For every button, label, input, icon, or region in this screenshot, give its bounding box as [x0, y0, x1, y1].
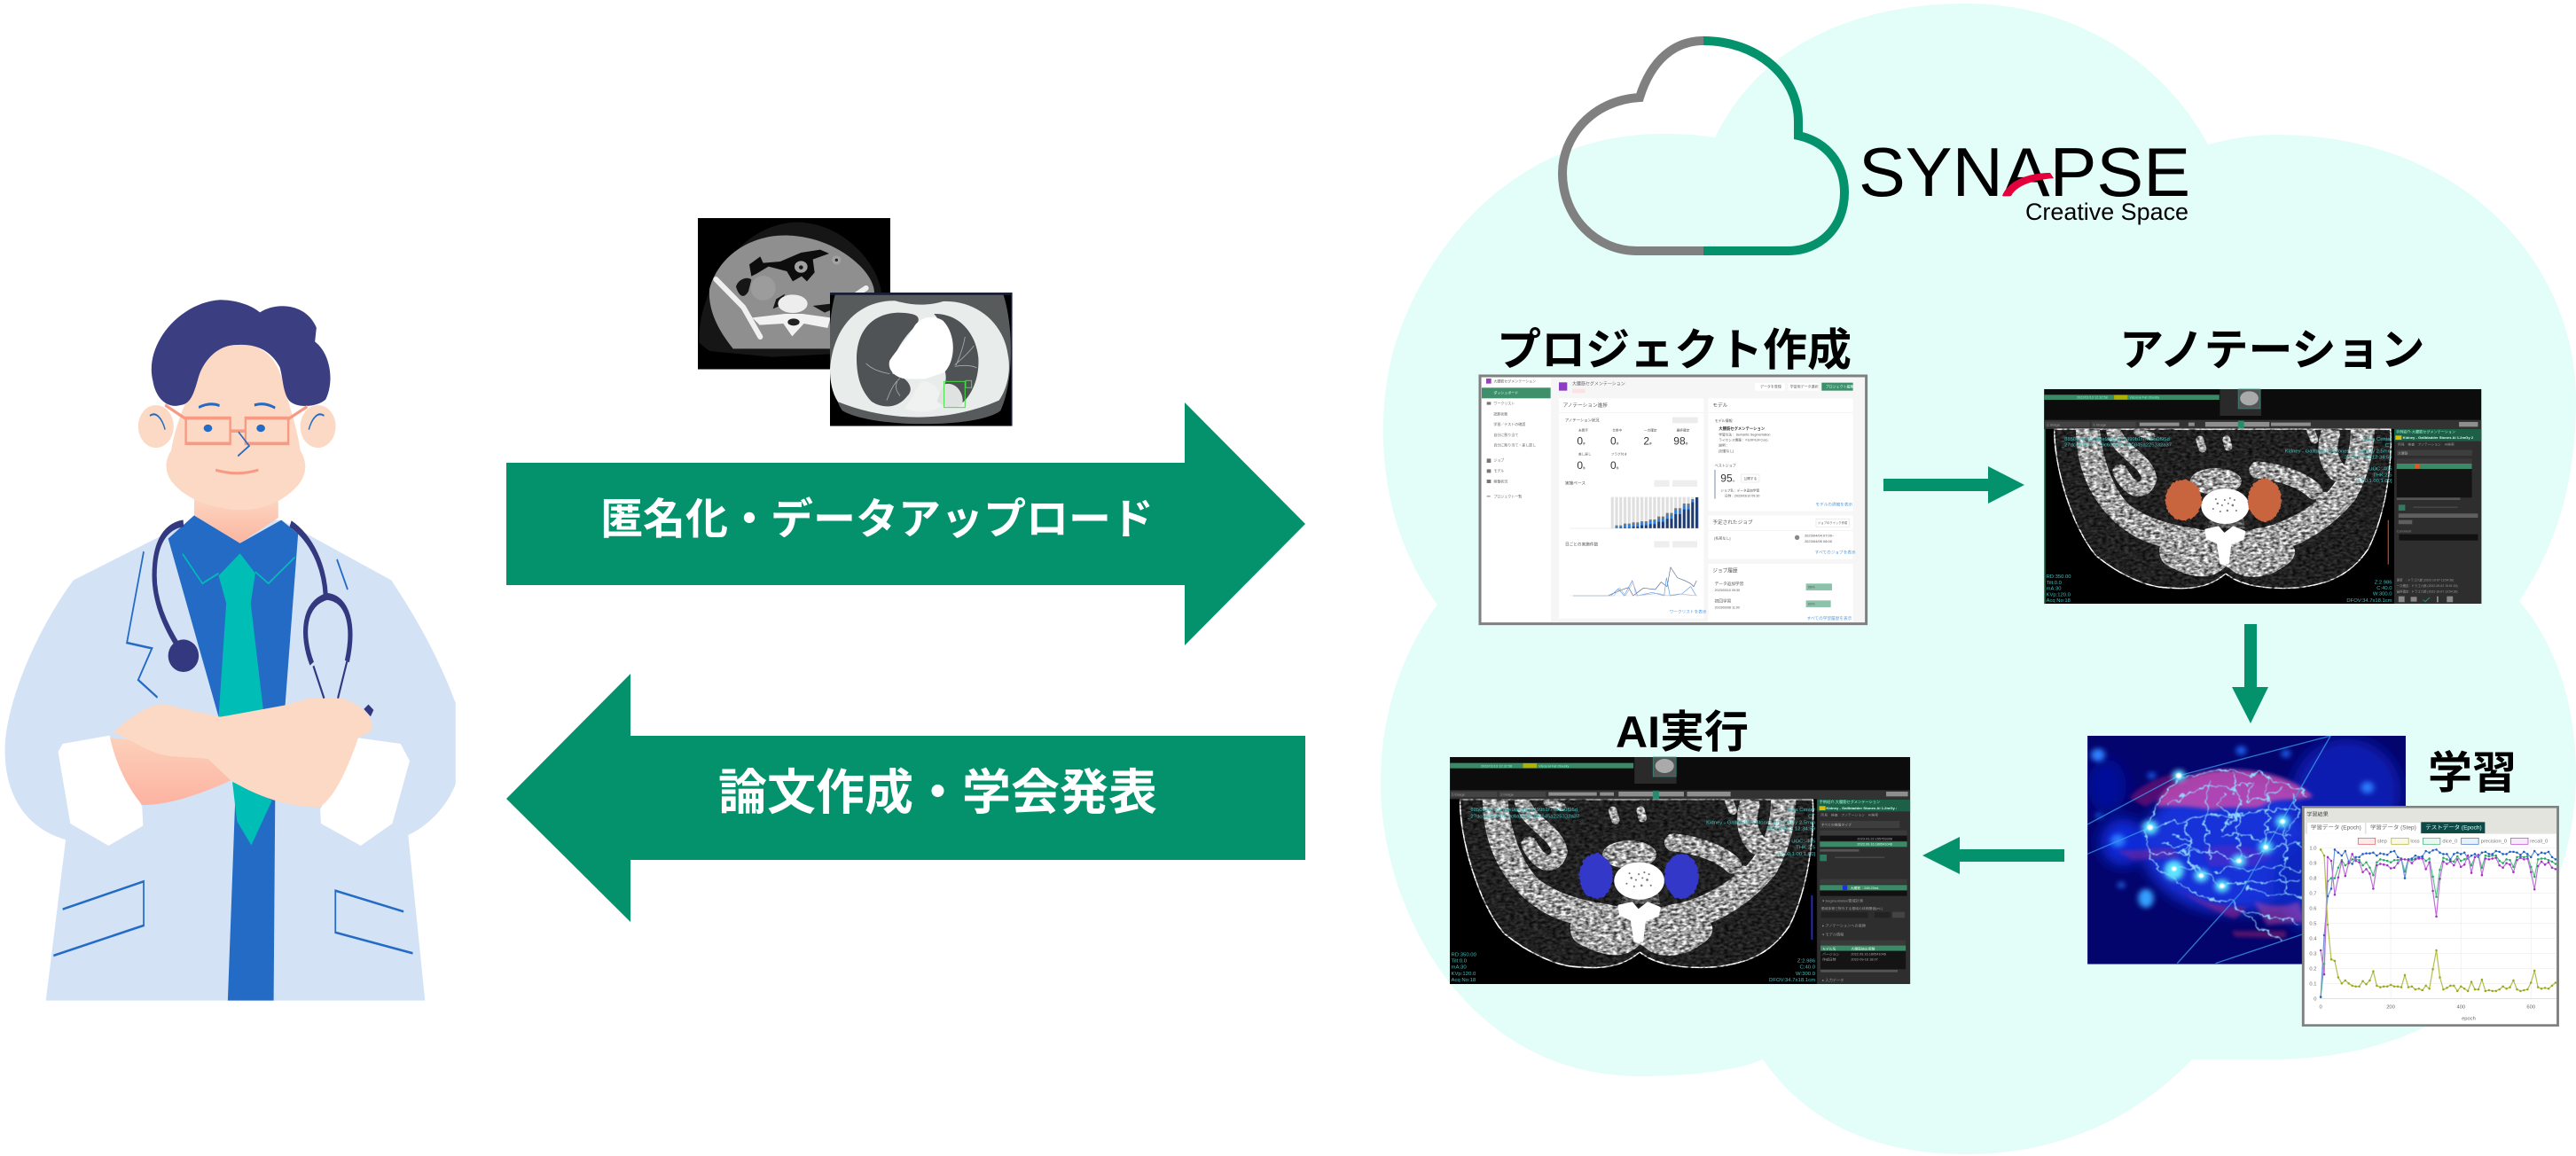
right AI panel — [1817, 799, 1910, 984]
heading: training: 学習 — [2428, 748, 2517, 798]
sidebar: 学習／テストの確認 — [1493, 421, 1525, 426]
overlay text: Tilt:0.0 — [1451, 959, 1467, 965]
right AI panel: 2023.03.22.155753306 — [1857, 837, 1892, 840]
arrow: annotation to training — [2232, 624, 2268, 723]
logo: SYNAPSE wordmark: Creative Space — [2025, 199, 2188, 225]
overlay text: mA:30 — [2047, 587, 2061, 592]
right AI panel: ▸ 入力データ — [1822, 977, 1844, 982]
axis labels: 0.1 — [2309, 981, 2316, 987]
chart: implementation pace stacked bars — [1570, 497, 1698, 528]
card: scheduled jobs: すべてのジョブを表示 — [1815, 549, 1856, 555]
chart panel: training metrics: テストデータ (Epoch) — [2425, 824, 2482, 831]
card: job history: すべての学習履歴を表示 — [1807, 615, 1852, 621]
chart panel: training metrics: 200 — [2386, 1004, 2395, 1010]
right AI panel: ▾ Segmentation領域計測 — [1822, 898, 1863, 903]
page header: 学習用データ選択 — [1790, 384, 1819, 389]
arrow: upload to cloud — [506, 402, 1305, 645]
overlay text: DFOV:34.7x18.1cm — [2346, 598, 2392, 604]
legend: recall_0 — [2530, 839, 2548, 844]
toolbar: 1 Image — [1452, 793, 1466, 797]
chart panel: training metrics: 学習結果 — [2306, 811, 2329, 817]
card: scheduled jobs: [名前なし] — [1714, 535, 1730, 541]
card: job history — [1708, 564, 1853, 622]
overlay text: RD:350.00 — [1451, 953, 1476, 958]
right AI panel: 2022.09.16.180541046 — [1851, 953, 1886, 957]
legend: step — [2377, 839, 2387, 844]
overlay text: mA:30 — [1451, 965, 1467, 971]
right tool panel: 更新 : ドラゴ六郎 (2022-10-07 13:54:36) — [2397, 578, 2454, 582]
card: annotation progress: 2件 — [1643, 435, 1652, 448]
toolbar: 1 Image — [1500, 793, 1515, 797]
series list: 2022/01/13 12:32:58 — [1481, 764, 1512, 768]
chart panel: training metrics: epoch — [2462, 1016, 2476, 1021]
card: model: 95% — [1720, 473, 1735, 485]
card: model: 大腰筋セグメンテーション — [1719, 426, 1766, 432]
right tool panel — [2394, 428, 2481, 604]
card: annotation progress — [1559, 398, 1703, 619]
heading: project creation: プロジェクト作成 — [1497, 325, 1852, 375]
overlay text: Z:2.986 — [1797, 959, 1815, 965]
overlay text: _88500794352d8e9ba3af73499b1f74b6a0f95d — [1467, 808, 1578, 813]
sidebar: 自分に割り当て・差し戻し — [1493, 442, 1536, 448]
right AI panel: 2022.09.16.180541046 — [1857, 843, 1892, 847]
right AI panel: モデル名 — [1822, 946, 1836, 950]
legend: dice_0 — [2442, 839, 2457, 844]
card: annotation progress: 0件 — [1577, 459, 1586, 472]
card: job history: 92% — [1808, 602, 1815, 606]
series list — [2044, 389, 2261, 416]
card: annotation progress: 仕掛中 — [1612, 427, 1623, 432]
card: annotation progress: 0件 — [1610, 459, 1619, 472]
overlay text — [1451, 808, 1816, 983]
right tool panel: 大腰筋 — [2398, 450, 2408, 455]
right AI panel: 大腰筋抽出実験 — [1851, 946, 1875, 950]
overlay text: KVp:120.0 — [2047, 592, 2071, 598]
right AI panel: 作成日時 — [1822, 957, 1836, 962]
card: model: 学習方法： Semantic Segmentation — [1719, 433, 1770, 437]
axis labels: 0.9 — [2309, 862, 2316, 867]
heading: annotation: アノテーション — [2119, 325, 2424, 375]
overlay text: CT — [2385, 443, 2392, 449]
card: model: ライセンス情報： FUJIFILM Corp. — [1719, 438, 1769, 442]
card: model: 説明： — [1719, 443, 1728, 448]
CT slice with blue psoas mask — [1450, 800, 1816, 984]
overlay text: 2022/01/13 12:34:59 — [2345, 455, 2392, 460]
card: annotation progress: 98件 — [1673, 435, 1688, 448]
axis labels: 0.6 — [2309, 907, 2316, 912]
series list — [1450, 757, 1677, 784]
page header: プロジェクト編集 — [1826, 384, 1854, 389]
card: job history: 95% — [1808, 585, 1815, 590]
gridlines — [2321, 848, 2556, 998]
overlay text: Nara Center — [1787, 808, 1815, 813]
sidebar: 稼働状況 — [1493, 478, 1507, 483]
card: annotation progress: 最終確定 — [1677, 427, 1690, 432]
sidebar: ダッシュボード — [1493, 389, 1518, 394]
sidebar: 大腰筋セグメンテーション — [1493, 378, 1536, 383]
axis labels: 1.0 — [2309, 847, 2316, 852]
card: model: モデル — [1712, 402, 1728, 409]
arrow label: upload: 匿名化・データアップロード — [600, 496, 1154, 543]
CT image: abdomen — [698, 218, 890, 370]
right AI panel: ▾ モデル情報 — [1822, 931, 1844, 936]
illustration: doctor — [5, 300, 456, 1001]
overlay text: Tilt:0.0 — [2047, 581, 2062, 586]
card: model: ジョブ名：データ追加学習 — [1720, 488, 1760, 493]
heading: AI run: AI実行 — [1616, 707, 1749, 757]
overlay text — [2047, 437, 2392, 604]
right tool panel: Comment — [2397, 530, 2411, 534]
image: glowing neural brain — [2087, 736, 2406, 965]
sidebar: 自分に割り当て — [1493, 432, 1518, 437]
card: annotation progress: 差し戻し — [1578, 452, 1592, 457]
card: annotation progress: 実施ペース — [1565, 480, 1586, 487]
overlay text: Z:2.986 — [2375, 580, 2392, 585]
chart: daily counts lines: 日ごとの実施件数 — [1565, 542, 1599, 548]
overlay text: KVp:120.0 — [1451, 972, 1476, 977]
sidebar: モデル — [1493, 468, 1504, 473]
toolbar: 1 Image — [2093, 422, 2107, 426]
card: scheduled jobs — [1708, 515, 1856, 559]
arrow: project to annotation — [1883, 466, 2024, 504]
panel: training image and chart — [2087, 736, 2558, 1026]
toolbar: 1 Image — [2047, 422, 2061, 426]
card: annotation progress: 一次確定 — [1644, 427, 1657, 432]
sidebar — [1482, 378, 1551, 622]
right AI panel: 大腰筋：248.20mL — [1851, 886, 1879, 890]
card: annotation progress: アノテーション状況 — [1565, 418, 1600, 424]
CT slice with orange psoas mask — [2045, 429, 2394, 604]
chart panel: training metrics: 学習データ (Epoch) — [2311, 824, 2361, 831]
right AI panel: 所見 検査 アノテーション AI検索 — [1820, 813, 1878, 817]
axis labels — [2309, 847, 2316, 1002]
right AI panel: すべての推論タイプ — [1821, 822, 1852, 826]
CT image: chest with detection boxes — [829, 293, 1013, 426]
overlay text: CT — [1808, 814, 1816, 819]
right AI panel: Kidney - Gallbladder Stones Ai 1.2mGy : — [1826, 806, 1897, 810]
right AI panel: ▸ アノテーションへの変換 — [1822, 922, 1866, 927]
legend: precision_0 — [2481, 839, 2507, 844]
overlay text: Acq No:18 — [1451, 978, 1476, 983]
axis labels: 0.3 — [2309, 952, 2316, 957]
card: scheduled jobs: 2023/04/04 07:00~ — [1805, 534, 1835, 538]
sidebar: ジョブ — [1493, 457, 1504, 463]
card: job history: 初回学習 — [1715, 598, 1732, 604]
card: model: ベストジョブ — [1715, 462, 1736, 467]
page header: 大腰筋セグメンテーション — [1572, 380, 1625, 387]
card: job history: ジョブ履歴 — [1712, 567, 1738, 574]
card: annotation progress: 0件 — [1610, 435, 1619, 448]
overlay text: C:40.0 — [2376, 586, 2392, 591]
card: model: [記載なし] — [1719, 449, 1734, 453]
toolbar — [1450, 790, 1910, 799]
overlay text: _88500794352d8e9ba3af73499b1f74b6a0f95d — [2061, 437, 2170, 442]
card: model: 日時：2023/03/10 09:30 — [1725, 494, 1759, 498]
card: annotation progress: アノテーション進捗 — [1563, 402, 1608, 409]
legend — [2358, 838, 2548, 844]
arrow: results back to doctor — [506, 674, 1305, 922]
right tool panel: Kidney - Gallbladder Stones Ai 1.2mGy 2 — [2403, 435, 2474, 440]
card: scheduled jobs: 予定されたジョブ — [1712, 519, 1753, 526]
overlay text: 2022/01/13 12:34:59 — [1766, 826, 1815, 832]
overlay text: W:300.0 — [2373, 592, 2392, 598]
card: job history: 2023/03/10 09:30 — [1715, 589, 1740, 592]
card: annotation progress: 未着手 — [1578, 427, 1588, 432]
logo: cloud outline — [1562, 41, 1844, 251]
arrow label: publication: 論文作成・学会発表 — [718, 765, 1157, 820]
axis labels: 0.2 — [2309, 966, 2316, 972]
series list: 2022/01/13 12:32:58 — [2077, 396, 2108, 400]
chart panel: training metrics: 0 — [2320, 1004, 2322, 1010]
overlay text: Kidney - Gallbladder Stones Ai 1.2mGy 2.5mm — [1706, 820, 1815, 825]
axis labels: 0 — [2314, 996, 2316, 1002]
card: scheduled jobs: ジョブのクイック作成 — [1818, 520, 1848, 525]
panel: AI run viewer screenshot — [1450, 757, 1910, 984]
metric lines — [2321, 849, 2556, 997]
series list: Visceral Fat Obesity — [2129, 396, 2159, 400]
overlay text: Kidney - Gallbladder Stones Ai 1.2mGy 2.5mm — [2285, 449, 2392, 455]
chart panel: training metrics: 400 — [2457, 1004, 2465, 1010]
card: scheduled jobs: 2023/04/05 08:00 — [1805, 539, 1833, 543]
axis labels: 0.8 — [2309, 877, 2316, 882]
card: model — [1708, 398, 1853, 512]
background cloud — [1381, 4, 2576, 1154]
overlay text: _27dcc8d6a37679c6a8836.2b0845a225332a37 — [2061, 443, 2172, 449]
axis labels: 0.5 — [2309, 922, 2316, 927]
overlay text: Nara Center — [2364, 437, 2392, 442]
overlay text: W:300.0 — [1796, 972, 1815, 977]
page header: データを登録 — [1760, 384, 1781, 389]
chart panel: training metrics — [2303, 807, 2558, 1026]
card: annotation progress: フラグ付き — [1611, 452, 1627, 457]
card: model: モデルの詳細を表示 — [1815, 501, 1853, 507]
panel: annotation viewer screenshot — [2044, 389, 2481, 604]
overlay text: [1.00,1.00,1.00] — [2356, 479, 2392, 484]
overlay text: _27dcc8d6a37679c6a8836.2b0845a225332a37 — [1467, 814, 1579, 819]
right AI panel: バージョン — [1822, 952, 1840, 957]
card: annotation progress: 0件 — [1577, 435, 1586, 448]
chart panel: training metrics: 600 — [2526, 1004, 2535, 1010]
card: job history: データ追加学習 — [1715, 581, 1744, 587]
sidebar: 読影状態 — [1493, 410, 1507, 416]
overlay text: C:40.0 — [1800, 965, 1815, 971]
axis labels: 0.4 — [2309, 937, 2316, 942]
card: model: 公開する — [1744, 476, 1758, 480]
sidebar: プロジェクト一覧 — [1493, 493, 1522, 498]
right AI panel: 2022-09-16 18:07 — [1851, 958, 1878, 962]
chart panel: training metrics: 学習データ (Step) — [2370, 824, 2416, 831]
overlay text: DFOV:34.7x18.1cm — [1769, 978, 1815, 983]
overlay text: UOC:-405 — [2369, 467, 2392, 473]
overlay text: Acq No:18 — [2047, 598, 2071, 604]
right tool panel: 一次確定 : ドラゴ六郎 (2022-09-02 19:01:15) — [2397, 583, 2458, 588]
toolbar — [2044, 420, 2481, 429]
overlay text: THK:2.5 — [1796, 846, 1815, 851]
overlay text: UOC:-405 — [1791, 840, 1815, 845]
sidebar: ワークリスト — [1493, 400, 1515, 405]
legend: loss — [2410, 839, 2420, 844]
chart: daily counts lines — [1565, 541, 1707, 615]
card: model: モデル情報 — [1715, 418, 1733, 423]
page header — [1559, 380, 1854, 393]
right tool panel: 所見 検査 アノテーション AI検索 — [2398, 442, 2455, 447]
axis labels: 0.7 — [2309, 892, 2316, 897]
right AI panel: 手例紹介-大腰筋セグメンテーション — [1820, 799, 1880, 804]
card: job history: 2023/03/08 11:00 — [1715, 605, 1740, 609]
right tool panel: 手例紹介-大腰筋セグメンテーション — [2396, 428, 2455, 434]
right tool panel: 最終確定 : ドラゴ六郎 (2022-10-07 13:54:36) — [2397, 589, 2458, 593]
overlay text: THK:2.5 — [2373, 473, 2392, 478]
overlay text: [1.00,1.00,1.00] — [1779, 852, 1815, 857]
overlay text: RD:350.00 — [2047, 574, 2071, 580]
arrow: training to AI run — [1922, 837, 2064, 874]
chart: daily counts lines: ワークリストを表示 — [1670, 609, 1707, 615]
series list: Visceral Fat Obesity — [1539, 764, 1570, 768]
CT images — [698, 218, 1013, 426]
panel: project dashboard screenshot — [1480, 376, 1867, 624]
logo: SYNAPSE wordmark: SYNAPSE — [1859, 133, 2190, 211]
right AI panel: 領域体積で除外する領域の体積閾値[mL] — [1821, 906, 1883, 910]
